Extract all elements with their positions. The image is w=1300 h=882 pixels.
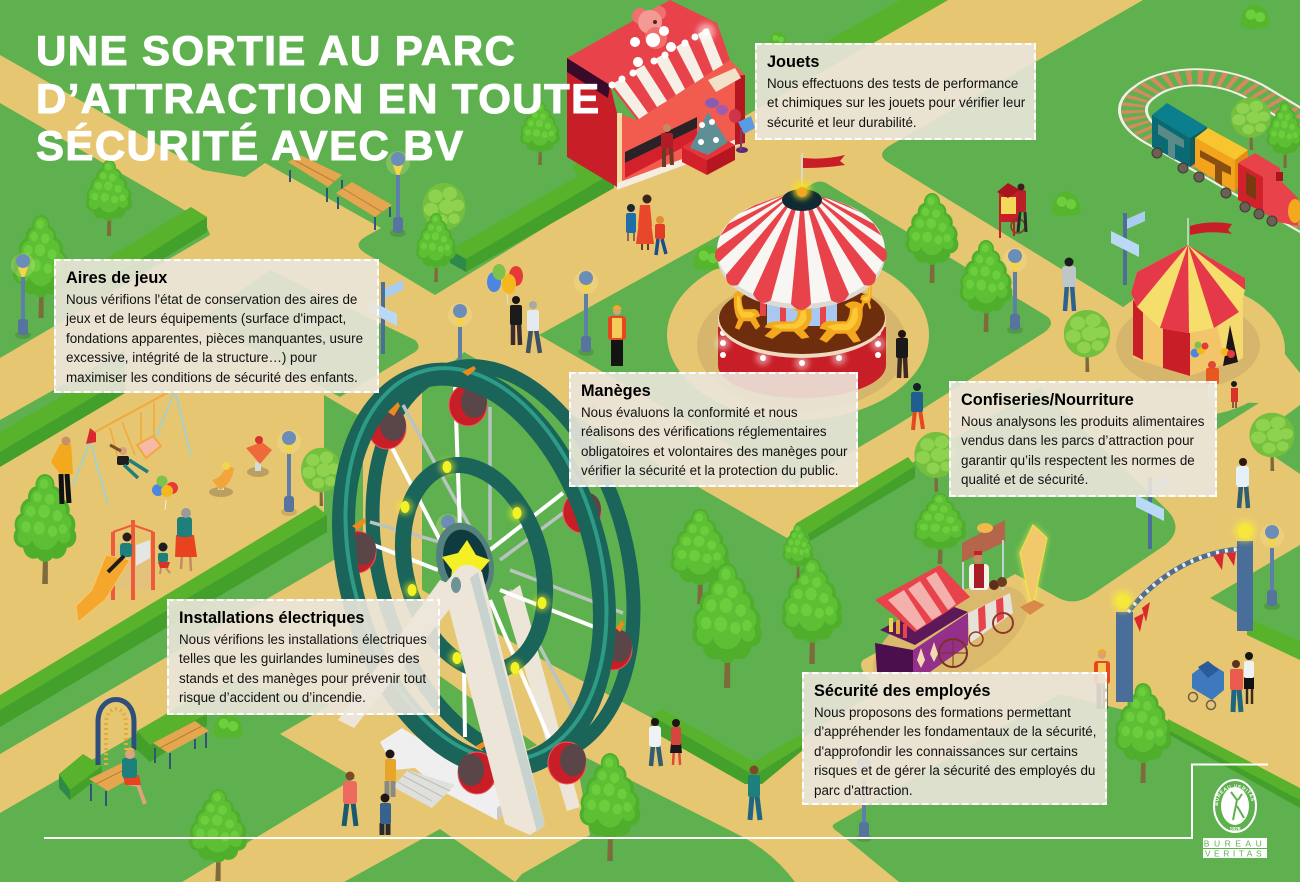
heading: Aires de jeux: Aires de jeux bbox=[66, 269, 167, 287]
text: Aires de jeux: jeux et de leurs équipements (surface d'impact, bbox=[66, 311, 346, 326]
heading: Jouets: Jouets bbox=[767, 53, 819, 71]
text: Installations électriques: telles que les guirlandes lumineuses des bbox=[179, 651, 419, 666]
text: Manèges bbox=[581, 405, 848, 478]
mother and children bbox=[636, 194, 654, 250]
Bureau Veritas logo: VERITAS bbox=[1205, 848, 1265, 858]
child near slide bbox=[158, 542, 170, 574]
visitor in black bbox=[896, 330, 908, 378]
wheel lights bbox=[397, 459, 550, 676]
clown and child bbox=[1206, 361, 1219, 398]
text: Installations électriques: risque d’accident ou d’incendie. bbox=[179, 690, 366, 705]
text: Aires de jeux: excessive, intégrité de la structure…) pour bbox=[66, 350, 317, 365]
slide tower bbox=[112, 520, 155, 600]
carousel centre and horses bbox=[734, 282, 872, 343]
woman on bench bbox=[122, 748, 145, 804]
wheel inner ring bbox=[381, 449, 567, 687]
popcorn cart bbox=[997, 183, 1026, 238]
bottom frame line bbox=[44, 764, 1268, 838]
text: Aires de jeux bbox=[66, 292, 363, 385]
balloons by the tent bbox=[1190, 342, 1235, 358]
wheel front spokes bbox=[353, 387, 597, 740]
text: Jouets: et chimiques sur les jouets pour vérifier leur bbox=[767, 95, 1025, 110]
title: SÉCURITÉ AVEC BV bbox=[36, 122, 464, 169]
Bureau Veritas logo bbox=[1203, 779, 1267, 858]
heading: Installations électriques: Installations électriques bbox=[179, 609, 364, 627]
teddy bear on roof bbox=[630, 6, 676, 67]
vendor bbox=[969, 551, 1007, 590]
panel: Installations électriques bbox=[167, 599, 440, 715]
circus tent bbox=[1131, 218, 1245, 376]
train track bbox=[1133, 77, 1300, 232]
slide bbox=[76, 555, 130, 622]
text: Aires de jeux: fondations apparentes, pièces manquantes, usure bbox=[66, 331, 363, 346]
toy display bbox=[682, 68, 755, 175]
lower gondolas bbox=[458, 742, 586, 794]
cart awning bbox=[875, 565, 970, 632]
Bureau Veritas logo: BUREAU bbox=[1204, 838, 1266, 848]
balloons bbox=[152, 476, 178, 510]
park worker in vest bbox=[608, 305, 626, 366]
purple cart body bbox=[875, 600, 968, 672]
panel: Jouets bbox=[755, 43, 1036, 140]
text: Manèges: réalisons des vérifications réglementaires bbox=[581, 424, 827, 439]
text: Aires de jeux: Nous vérifions l'état de conservation des aires de bbox=[66, 292, 357, 307]
swing set bbox=[73, 388, 191, 505]
wheel support legs bbox=[338, 565, 545, 835]
food cart with ice cream sign bbox=[875, 520, 1048, 672]
glowing cone sign bbox=[1018, 523, 1048, 615]
toy shop stand bbox=[567, 0, 755, 190]
arbour bbox=[98, 700, 134, 765]
signposts bbox=[369, 211, 1170, 549]
text: Sécurité des employés: Nous proposons des formations permettant bbox=[814, 705, 1071, 720]
text: Confiseries/Nourriture: Nous analysons les produits alimentaires bbox=[961, 414, 1204, 429]
second park worker bbox=[1094, 649, 1110, 709]
wheel front rim bbox=[302, 345, 646, 795]
text: Manèges: obligatoires et volontaires des manèges pour bbox=[581, 444, 848, 459]
benches bbox=[89, 155, 392, 806]
panel: Sécurité des employés bbox=[802, 672, 1107, 805]
gondola orange tips bbox=[352, 366, 624, 750]
entrance arch bbox=[1112, 520, 1256, 702]
text: Sécurité des employés: parc d'attraction. bbox=[814, 783, 913, 798]
text: Jouets bbox=[767, 76, 1025, 130]
spring riders bbox=[209, 436, 272, 497]
heading: Confiseries/Nourriture: Confiseries/Nourriture bbox=[961, 391, 1134, 409]
man in yellow bbox=[51, 436, 73, 504]
couple by hedge bbox=[649, 718, 661, 766]
woman in teal and red skirt bbox=[175, 508, 197, 571]
family with stroller bbox=[1188, 652, 1254, 712]
panel: Aires de jeux bbox=[54, 259, 379, 393]
text: Confiseries/Nourriture: qualité et de sécurité. bbox=[961, 472, 1088, 487]
wheel back spokes bbox=[370, 405, 623, 717]
gondolas bbox=[338, 384, 632, 670]
man on path bbox=[1062, 258, 1076, 311]
street lamps bbox=[11, 151, 1284, 842]
text: Confiseries/Nourriture: garantir qu’ils respectent les normes de bbox=[961, 453, 1195, 468]
panel: Confiseries/Nourriture bbox=[949, 381, 1217, 497]
title: UNE SORTIE AU PARC bbox=[36, 27, 516, 74]
wheel rear rim bbox=[331, 337, 675, 787]
heading: Sécurité des employés: Sécurité des employés bbox=[814, 682, 990, 700]
text: Installations électriques: Nous vérifions les installations électriques bbox=[179, 632, 427, 647]
text: Sécurité des employés: risques et de gérer la sécurité des employés du bbox=[814, 763, 1095, 778]
playground bbox=[51, 388, 272, 622]
ferris wheel bbox=[302, 337, 675, 835]
text: Manèges: Nous évaluons la conformité et nous bbox=[581, 405, 798, 420]
visitor in teal bbox=[748, 766, 760, 820]
text: Sécurité des employés: d'approfondir les connaissances sur certains bbox=[814, 744, 1078, 759]
text: Installations électriques: stands et des manèges pour prévenir tout bbox=[179, 671, 426, 686]
wheel base stairs bbox=[380, 728, 512, 820]
slide child bbox=[108, 532, 132, 572]
heading: Manèges: Manèges bbox=[581, 382, 651, 400]
swing child bbox=[110, 445, 148, 478]
wheel hub and star bbox=[428, 516, 502, 608]
text: Aires de jeux: maximiser les conditions de sécurité des enfants. bbox=[66, 370, 358, 385]
Bureau Veritas logo: BUREAU VERITAS bbox=[1215, 784, 1254, 806]
text: Jouets: Nous effectuons des tests de performance bbox=[767, 76, 1018, 91]
text: Confiseries/Nourriture: vendus dans les parcs d’attraction pour bbox=[961, 433, 1194, 448]
group by the stairs bbox=[343, 772, 357, 826]
striped wagon bbox=[968, 593, 1013, 646]
visitor in blue vest bbox=[911, 383, 923, 430]
panel: Manèges bbox=[569, 372, 858, 487]
text: Sécurité des employés bbox=[814, 705, 1096, 798]
carousel striped roof bbox=[715, 181, 887, 310]
people bbox=[122, 194, 1254, 835]
text: Installations électriques bbox=[179, 632, 427, 705]
text: Jouets: sécurité et leur durabilité. bbox=[767, 115, 917, 130]
title: D’ATTRACTION EN TOUTE bbox=[36, 74, 600, 122]
train bbox=[1152, 103, 1300, 226]
cart sign bbox=[962, 520, 1005, 600]
text: Sécurité des employés: d'appréhender les fondamentaux de la sécurité, bbox=[814, 724, 1096, 739]
shopkeeper bbox=[661, 124, 673, 167]
couple with balloons bbox=[487, 264, 523, 305]
title bbox=[36, 27, 600, 169]
carousel drum bbox=[716, 282, 886, 398]
text: Confiseries/Nourriture bbox=[961, 414, 1204, 487]
text: Manèges: vérifier la sécurité et la protection du public. bbox=[581, 463, 839, 478]
Bureau Veritas logo: 1828 bbox=[1229, 827, 1241, 833]
hiker with backpack bbox=[1236, 458, 1249, 508]
rear support leg bbox=[503, 585, 580, 811]
carousel bbox=[715, 153, 887, 398]
